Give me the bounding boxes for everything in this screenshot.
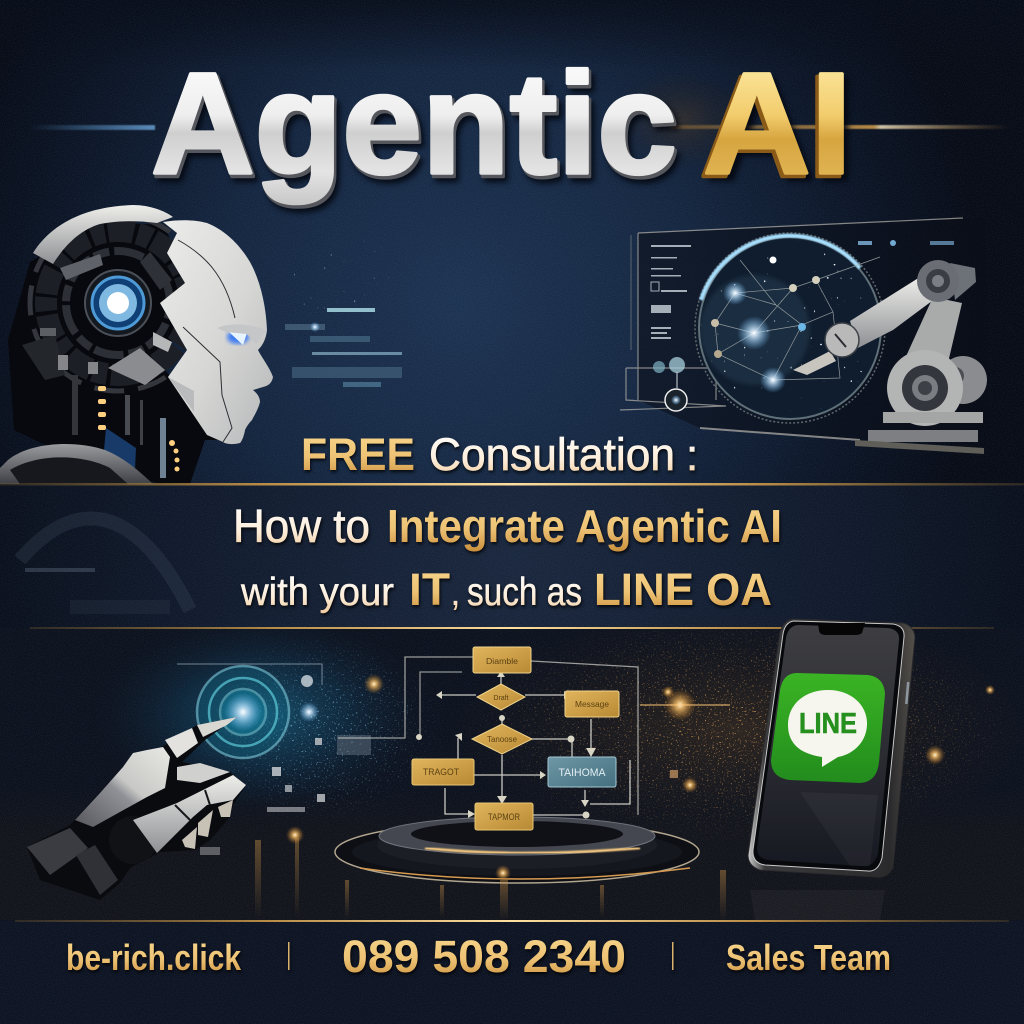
- hand: index finger: [165, 717, 237, 758]
- arm: upper link: [903, 297, 962, 367]
- phone: notch: [818, 623, 865, 635]
- title: AI: [703, 43, 852, 204]
- hand: dark silhouette: [27, 717, 246, 900]
- robot hand: [27, 717, 246, 900]
- robot arm: [793, 260, 987, 454]
- flow box: bottom: TAPMOR: [488, 812, 520, 822]
- phone: screen: [757, 625, 899, 866]
- panel frame: [620, 218, 963, 440]
- title: Agentic: [151, 43, 677, 204]
- footer contact bar: [66, 931, 891, 982]
- head: amber lights: [98, 386, 180, 472]
- arm: shoulder joint: [917, 260, 976, 302]
- glowing target rings: [177, 664, 322, 758]
- title streaks: [30, 125, 1010, 130]
- LINE speech bubble: [788, 690, 867, 767]
- node and laptop hologram: [653, 357, 687, 411]
- hand: forearm: [27, 828, 118, 895]
- heading: with your IT: IT: [409, 564, 450, 615]
- flow box: teal: TAIHOMA: [558, 767, 606, 779]
- head: face panel seams: [178, 240, 235, 442]
- head: shoulder: [0, 444, 153, 484]
- flow decision: lower: Tanoose: [487, 735, 518, 744]
- flow box: bottom: [475, 803, 533, 830]
- panel readouts: [651, 240, 954, 339]
- data streaks beside head: [284, 234, 402, 387]
- head: white face: [160, 220, 273, 444]
- head: mechanical back: [8, 222, 225, 484]
- flow decision: upper: Draft: [493, 695, 509, 702]
- LINE app icon: [771, 673, 885, 783]
- footer: separator: [288, 942, 290, 970]
- head: mechanical rings: [30, 215, 206, 391]
- flowchart: [338, 647, 638, 830]
- flares and pixel squares: [200, 674, 995, 855]
- flow box: top: Diamble: [486, 657, 519, 666]
- flow box: trigger: TRAGOT: [423, 767, 459, 777]
- arm: elbow joint: [825, 323, 859, 357]
- head: silver crown: [33, 205, 173, 264]
- hand: wrist: [109, 816, 157, 864]
- panel backing: [638, 218, 990, 440]
- hand: lower finger tips: [182, 800, 233, 849]
- heading: with your IT: with your: [240, 571, 394, 614]
- divider middle: [30, 627, 994, 629]
- flow box: top: [473, 647, 531, 673]
- heading: with your IT: such as: [467, 571, 582, 614]
- globe: [695, 233, 885, 423]
- flow box: right: [565, 691, 619, 717]
- smartphone: [748, 619, 915, 877]
- flow decision: lower: [472, 724, 532, 754]
- footer: website: be-rich.click: [66, 937, 242, 978]
- flowchart arrowheads: [416, 671, 596, 818]
- flow box: trigger: [412, 759, 474, 785]
- robot head: [0, 205, 273, 484]
- divider top: [0, 483, 1024, 486]
- heading: how to integrate: Integrate Agentic AI: [387, 500, 782, 552]
- flowchart connectors: [338, 657, 638, 815]
- head: cheek plate shading: [168, 377, 194, 412]
- divider bottom: [15, 920, 1009, 922]
- head: glowing eye: [217, 324, 266, 345]
- footer: separator 2: [672, 942, 674, 970]
- arm: base joint: [887, 350, 987, 426]
- arm: forearm: [850, 277, 936, 348]
- head: mech blocks: [22, 252, 172, 445]
- heading: free consultation: Consultation: [429, 429, 675, 480]
- floor reflections: [255, 838, 885, 920]
- heading: how to integrate: [233, 500, 782, 552]
- LINE wordmark: LINE: [799, 708, 857, 740]
- particle fields: [190, 630, 1024, 840]
- phone: screen reflection: [800, 792, 878, 866]
- arm: base plates: [855, 412, 984, 454]
- holographic panel with globe: [620, 218, 990, 440]
- hand: thumb: [133, 775, 246, 853]
- phone: bezel: [753, 621, 904, 871]
- left faint circuit in middle band: [20, 519, 190, 614]
- heading: free consultation: [301, 429, 698, 480]
- platform: [335, 817, 699, 883]
- heading: with your IT: LINE OA: [594, 564, 772, 615]
- head: circuit board: [104, 428, 136, 470]
- heading: how to integrate: How to: [233, 500, 370, 552]
- hand: back of hand: [75, 747, 170, 827]
- heading: with your IT: ,: [450, 571, 461, 614]
- phone: body: [748, 619, 915, 877]
- hand: middle finger: [177, 763, 230, 783]
- flow box: right: Message: [575, 700, 610, 709]
- heading: free consultation: FREE: [301, 429, 415, 480]
- head: glowing ear core: [85, 270, 151, 336]
- flow box: teal: [548, 757, 616, 787]
- footer: phone number: 089 508 2340: [342, 931, 626, 982]
- footer: team: Sales Team: [726, 937, 891, 978]
- heading: with your IT: [240, 564, 772, 615]
- flow decision: upper: [477, 684, 525, 710]
- heading: free consultation: :: [686, 431, 698, 480]
- phone: side button: [905, 682, 909, 704]
- arm: tool tip: [793, 351, 836, 375]
